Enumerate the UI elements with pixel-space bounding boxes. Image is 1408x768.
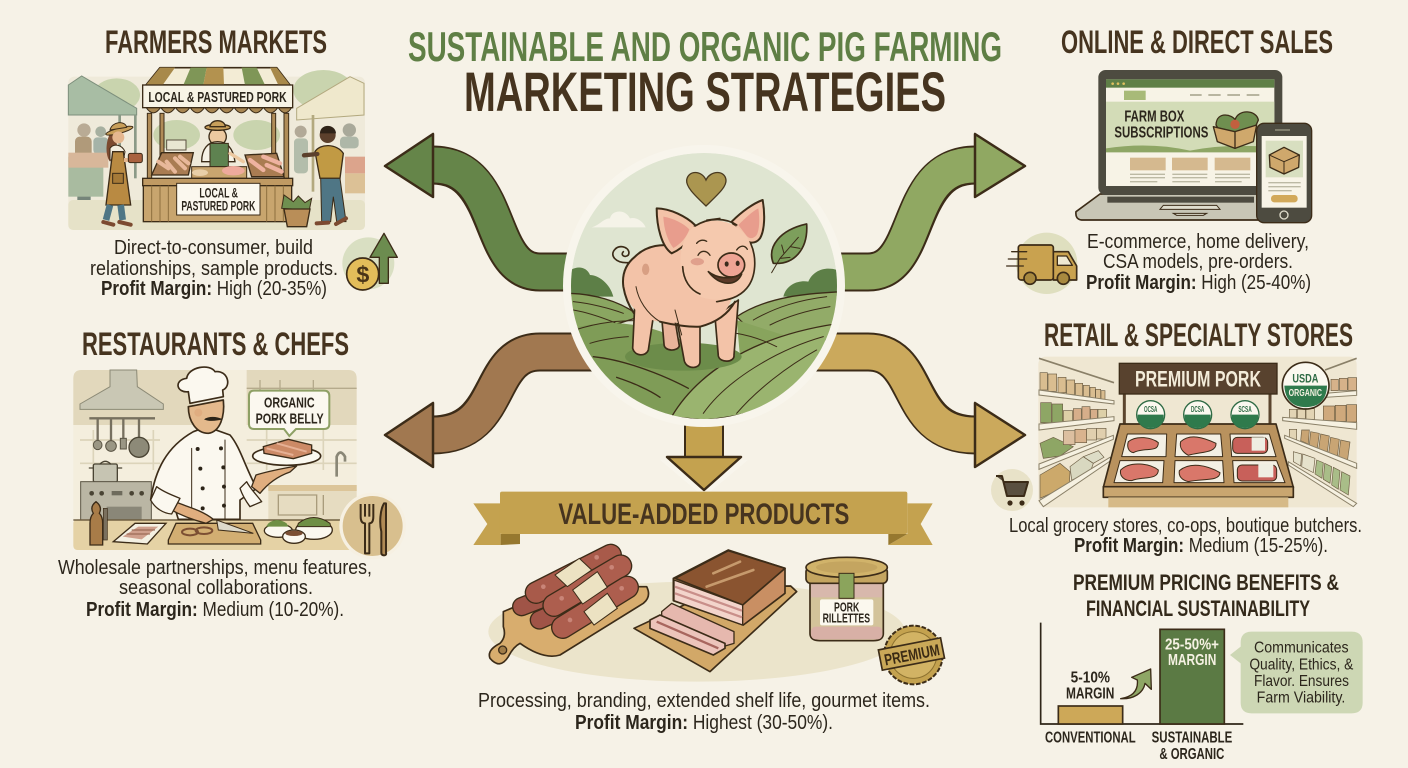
banner: value-added products <box>473 492 933 545</box>
illustration: chef kitchen <box>73 367 406 559</box>
arrow: to online and direct sales <box>808 134 1025 272</box>
title: SUSTAINABLE AND ORGANIC PIG FARMING <box>408 23 1002 70</box>
bar: sustainable and organic: MARGIN <box>1168 652 1216 669</box>
arrow: margin increase <box>1121 669 1151 699</box>
sign: premium pork <box>1119 363 1277 394</box>
callout: quality, ethics and flavor: Communicates <box>1254 640 1349 657</box>
callout: organic pork belly: PORK BELLY <box>256 410 324 427</box>
text: restaurants description: Wholesale partnerships, menu features, <box>58 556 372 579</box>
sausages on board <box>489 555 649 664</box>
text: value-added description: Processing, branding, extended shelf life, gourmet items. <box>478 689 930 712</box>
callout: quality, ethics and flavor <box>1230 632 1363 713</box>
bar: conventional: 5-10% <box>1071 670 1110 687</box>
icon: fork and knife <box>339 493 406 559</box>
bar: sustainable and organic <box>1152 629 1232 763</box>
screen text: farm box subscriptions: FARM BOX <box>1124 108 1185 125</box>
small USDA-style badges: DCSA <box>1191 405 1204 414</box>
bar: conventional: CONVENTIONAL <box>1045 730 1136 747</box>
bar: conventional <box>1045 670 1136 747</box>
badge: premium: PREMIUM <box>883 642 941 669</box>
bar: sustainable and organic: 25-50%+ <box>1165 636 1219 653</box>
icon: shopping cart <box>991 469 1033 511</box>
sign: premium pork: PREMIUM PORK <box>1135 367 1261 392</box>
small USDA-style badges <box>1137 401 1259 429</box>
right shelves <box>1283 358 1357 507</box>
bar: sustainable and organic: & ORGANIC <box>1159 746 1224 763</box>
sign: local and pastured pork top <box>143 85 293 108</box>
jar: pork rillettes: RILLETTES <box>823 612 870 626</box>
central pig illustration <box>563 145 845 427</box>
heading: restaurants and chefs: RESTAURANTS & CHEFS <box>82 326 349 362</box>
text: restaurants description <box>58 556 372 621</box>
sign: local and pastured pork counter: PASTURED PORK <box>181 197 255 213</box>
text: farmers markets description: Direct-to-consumer, build <box>114 236 313 259</box>
badge: premium <box>875 620 948 690</box>
title <box>408 23 1002 123</box>
callout: organic pork belly: ORGANIC <box>264 394 315 411</box>
text: retail description <box>1009 514 1362 557</box>
screen text: farm box subscriptions: SUBSCRIPTIONS <box>1114 125 1208 142</box>
badge: USDA organic: USDA <box>1292 372 1319 386</box>
chef figure <box>151 367 321 533</box>
heading: premium pricing benefits: FINANCIAL SUSTAINABILITY <box>1086 596 1310 621</box>
woman customer <box>103 123 142 225</box>
screen text: farm box subscriptions <box>1114 108 1208 142</box>
sign: local and pastured pork counter <box>177 183 260 215</box>
forearm right <box>252 466 297 493</box>
heading: premium pricing benefits: PREMIUM PRICING BENEFITS & <box>1073 570 1339 595</box>
text: farmers markets description <box>90 236 338 300</box>
bar: sustainable and organic: SUSTAINABLE <box>1152 730 1232 747</box>
illustration: farmers market stall <box>68 68 397 290</box>
icon: profit coin and up arrow <box>342 233 397 290</box>
text: value-added description <box>478 689 930 734</box>
text: farmers markets description: relationships, sample products. <box>90 257 338 280</box>
man customer <box>304 126 346 224</box>
callout: quality, ethics and flavor: Farm Viability. <box>1257 690 1345 707</box>
text: restaurants description: seasonal collaborations. <box>119 576 313 599</box>
forearm left <box>168 502 213 523</box>
sign: local and pastured pork counter: LOCAL & <box>199 185 238 201</box>
arrow: to value-added products <box>660 410 748 497</box>
jar: pork rillettes: PORK <box>834 600 860 614</box>
text: online description: Profit Margin: High (25-40%) <box>1086 271 1311 294</box>
pork belly on board <box>634 550 797 672</box>
jar: pork rillettes <box>806 557 887 641</box>
arrow: to restaurants and chefs <box>385 352 600 467</box>
illustration: retail meat case <box>1038 357 1357 507</box>
badge: USDA organic: ORGANIC <box>1289 388 1322 399</box>
left shelves <box>1039 358 1114 507</box>
title: MARKETING STRATEGIES <box>464 60 946 123</box>
icon: profit coin and up arrow: $ <box>356 262 369 288</box>
illustration: laptop and phone storefront <box>1007 70 1312 294</box>
text: farmers markets description: Profit Margin: High (20-35%) <box>101 277 327 300</box>
arrow: to farmers markets <box>385 134 600 272</box>
bar chart: margin comparison <box>1041 623 1363 763</box>
heading: premium pricing benefits <box>1073 570 1339 621</box>
text: retail description: Profit Margin: Medium (15-25%). <box>1074 534 1328 557</box>
callout: quality, ethics and flavor: Flavor. Ensures <box>1254 673 1349 690</box>
sign: local and pastured pork top: LOCAL & PASTURED PORK <box>148 90 287 106</box>
text: value-added description: Profit Margin: Highest (30-50%). <box>575 711 833 734</box>
text: online description: CSA models, pre-orders. <box>1103 250 1293 273</box>
heading: farmers markets: FARMERS MARKETS <box>105 24 327 60</box>
icon: delivery truck <box>1007 233 1077 294</box>
text: online description: E-commerce, home delivery, <box>1087 230 1309 253</box>
bar: conventional: MARGIN <box>1066 686 1114 703</box>
callout: organic pork belly <box>249 391 329 436</box>
text: restaurants description: Profit Margin: Medium (10-20%). <box>86 598 344 621</box>
small USDA-style badges: OCSA <box>1144 405 1157 414</box>
badge: USDA organic <box>1282 362 1329 409</box>
arrow: to retail and specialty stores <box>808 352 1025 467</box>
banner: value-added products: VALUE-ADDED PRODUCTS <box>558 498 849 531</box>
text: online description <box>1086 230 1311 294</box>
callout: quality, ethics and flavor: Quality, Ethics, & <box>1249 656 1354 673</box>
small USDA-style badges: SCSA <box>1238 405 1252 414</box>
illustration: value-added pork products <box>488 550 948 690</box>
